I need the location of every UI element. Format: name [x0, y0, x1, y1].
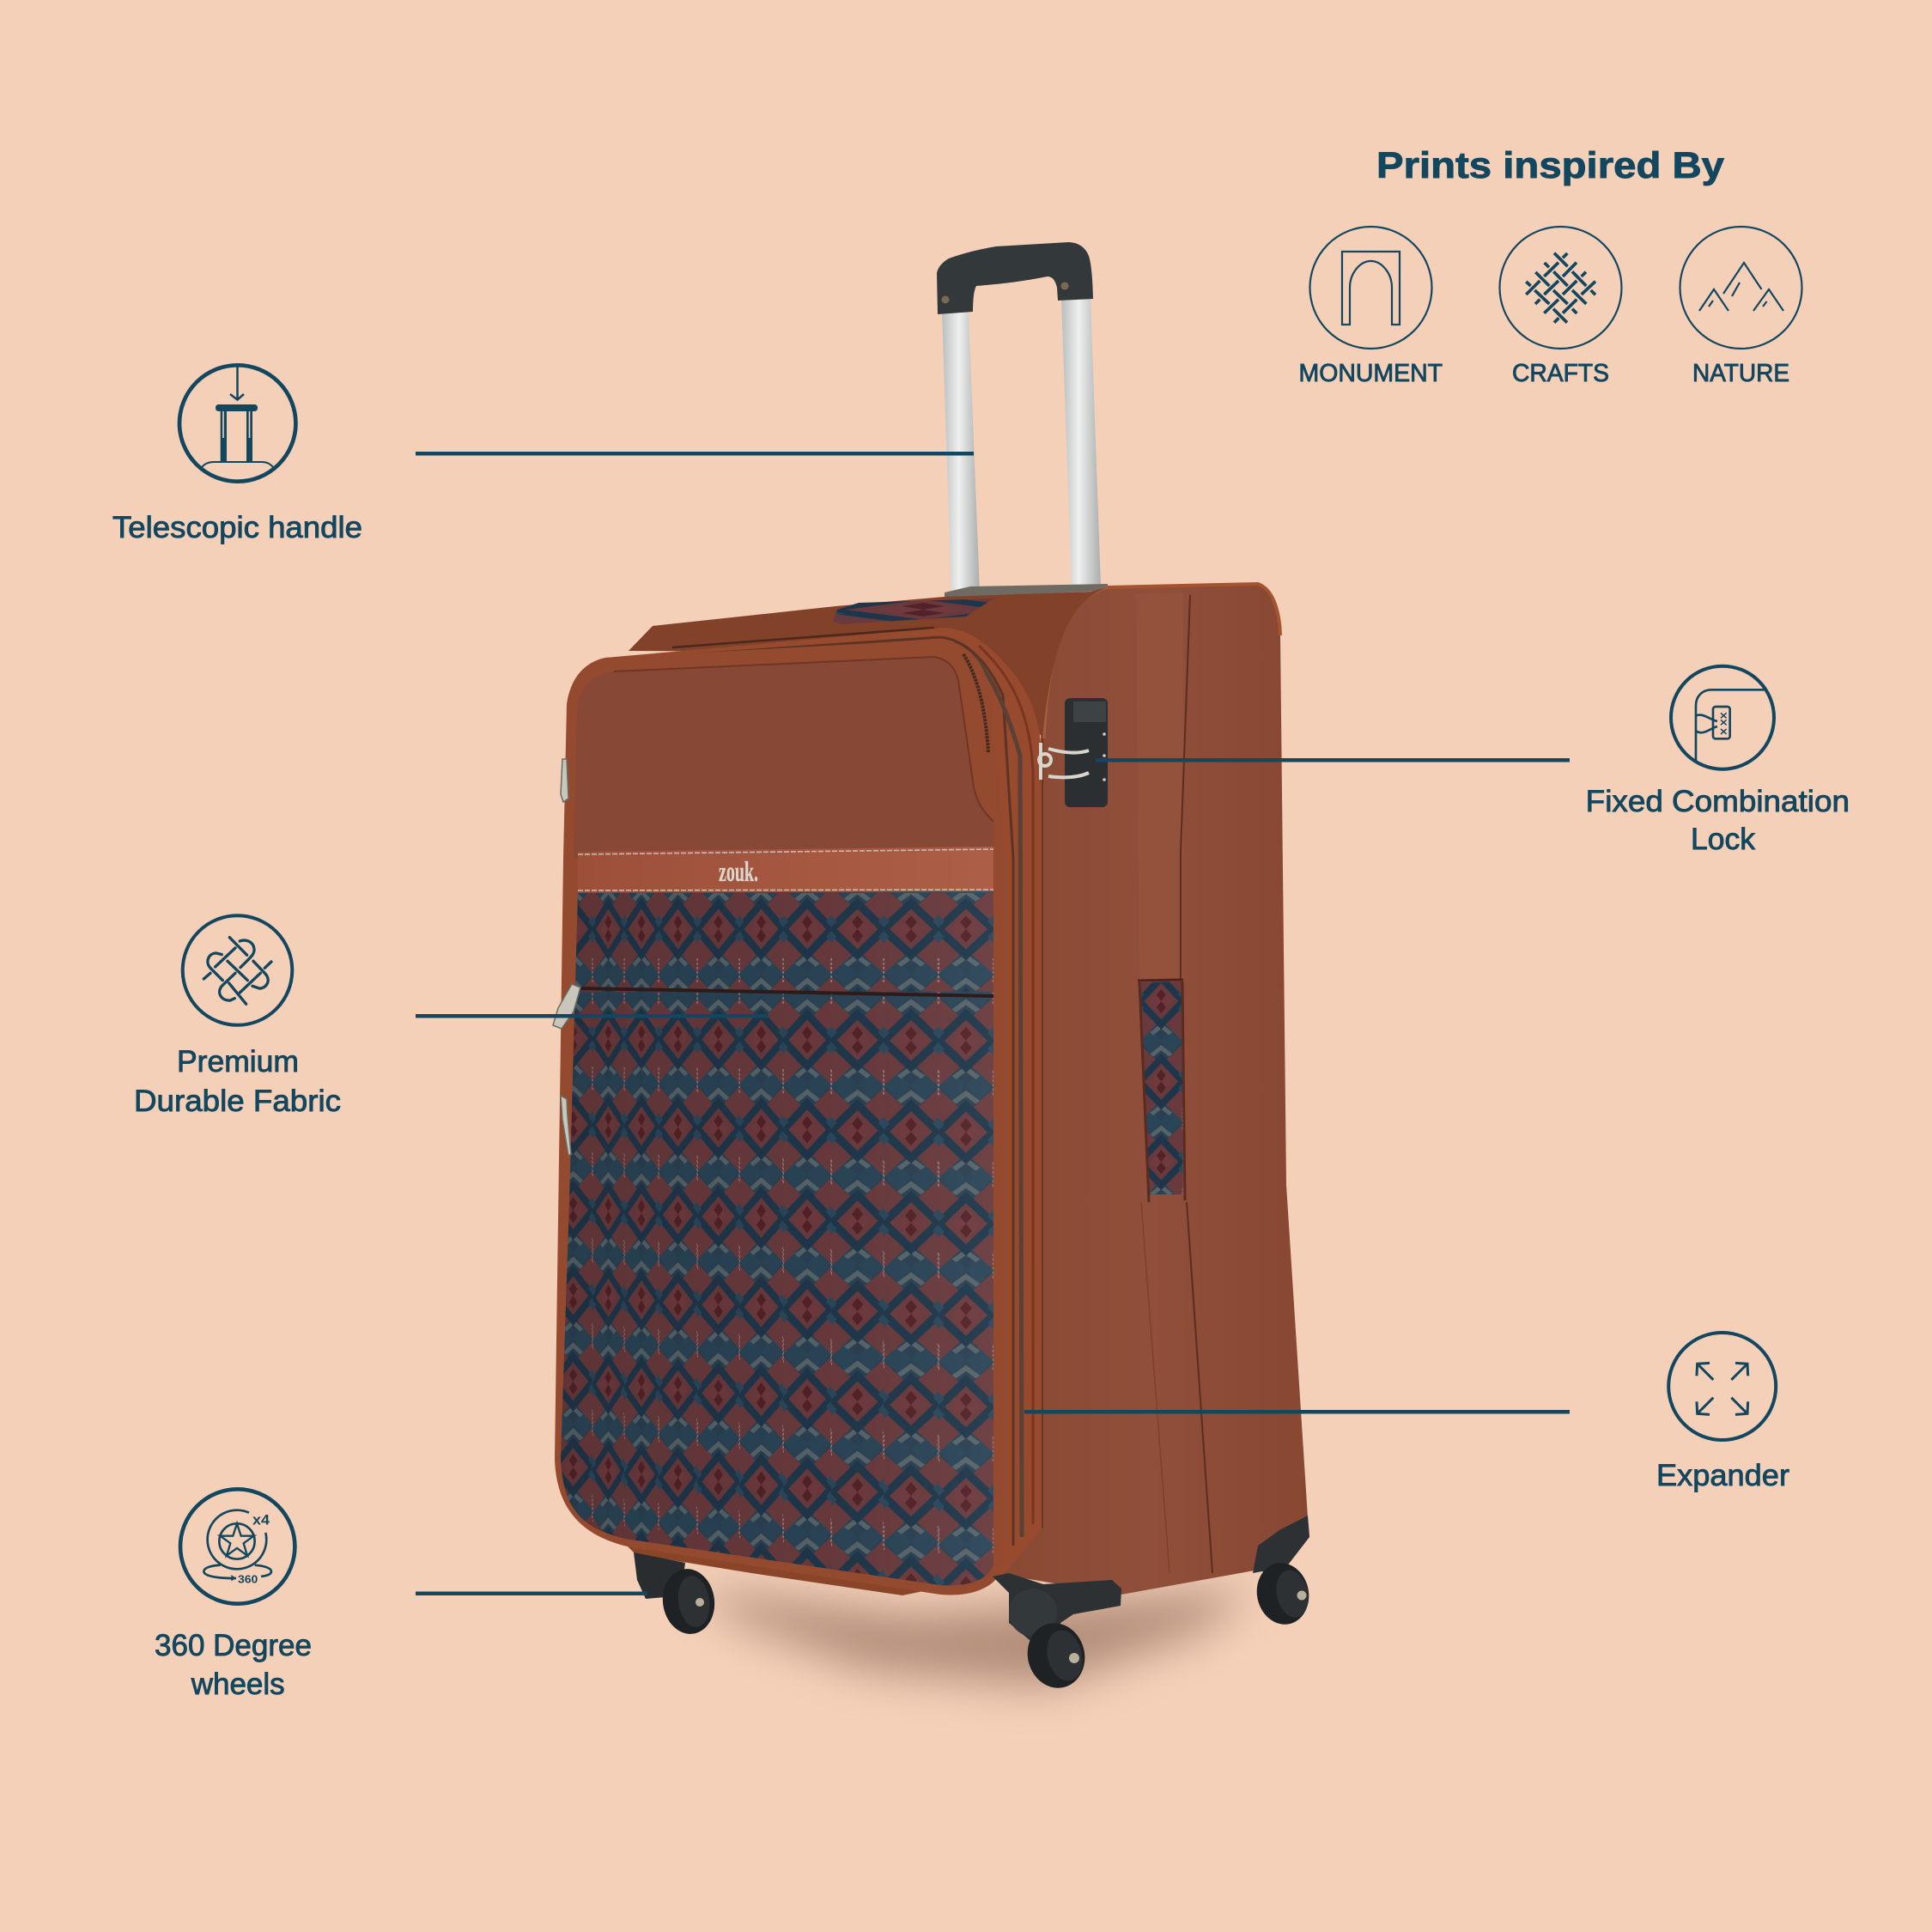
label: 360 degree wheels: wheels — [191, 1668, 285, 1701]
label: fixed combination lock: Lock — [1691, 823, 1756, 856]
label: 360 degree wheels: 360 Degree — [155, 1629, 312, 1662]
label: fixed combination lock — [1586, 785, 1850, 856]
label: premium durable fabric: Premium — [177, 1045, 299, 1078]
label: nature: NATURE — [1692, 360, 1789, 387]
icon: nature mountains — [1680, 227, 1801, 349]
expander zip bands — [605, 628, 1042, 1578]
icon: 360 wheel — [180, 1489, 295, 1604]
left zipper pulls — [553, 759, 580, 1156]
printed front panel — [561, 891, 993, 1585]
icon: 360 wheel: x4 — [252, 1511, 270, 1528]
icon: 360 wheel: 360 — [238, 1572, 258, 1585]
pocket seam and zipper — [614, 654, 993, 822]
brand logo: zouk. — [719, 857, 758, 888]
front centre wheel — [993, 1573, 1121, 1694]
panel: nature print — [1680, 227, 1801, 387]
leader line — [1024, 1410, 1570, 1413]
brand strip — [578, 847, 993, 892]
side panel — [993, 584, 1309, 1595]
floor shadow — [696, 1589, 1254, 1687]
callout: telescopic handle — [112, 365, 974, 544]
label: crafts: CRAFTS — [1512, 360, 1609, 387]
combination lock — [1039, 698, 1108, 807]
heading: prints inspired by: Prints inspired By — [1376, 145, 1724, 186]
label: telescopic handle: Telescopic handle — [112, 511, 362, 544]
leader line — [416, 1592, 647, 1595]
leader line — [416, 452, 974, 455]
icon: expander arrows — [1668, 1333, 1776, 1440]
icon: monument arch — [1310, 227, 1432, 349]
label: premium durable fabric — [134, 1045, 341, 1118]
rear left wheel — [634, 1552, 719, 1637]
label: 360 degree wheels — [155, 1629, 312, 1701]
front outer piping — [555, 640, 1003, 1595]
icon: telescopic handle — [179, 365, 295, 482]
leader line — [1096, 758, 1570, 762]
label: premium durable fabric: Durable Fabric — [134, 1084, 341, 1118]
leader line — [416, 1014, 769, 1018]
icon: combination lock — [1671, 666, 1774, 769]
icon: crafts weave — [1499, 227, 1621, 349]
telescopic handle — [937, 242, 1108, 598]
label: monument: MONUMENT — [1298, 360, 1443, 387]
callout: 360 degree wheels — [155, 1489, 647, 1701]
top surface — [629, 587, 1108, 738]
suitcase photo illustration — [550, 242, 1315, 1694]
panel: monument print — [1298, 227, 1443, 387]
icon: fabric knot — [183, 915, 292, 1025]
callout: premium durable fabric — [134, 915, 769, 1118]
callout: expander — [1024, 1333, 1789, 1492]
rear right wheel — [1251, 1516, 1315, 1629]
label: expander: Expander — [1656, 1459, 1789, 1492]
label: fixed combination lock: Fixed Combination — [1586, 785, 1850, 818]
front upper pocket — [574, 657, 993, 859]
bottom skirt — [623, 1541, 936, 1595]
front pocket zipper — [579, 988, 993, 996]
panel: crafts print — [1499, 227, 1621, 387]
callout: fixed combination lock — [1096, 666, 1850, 856]
